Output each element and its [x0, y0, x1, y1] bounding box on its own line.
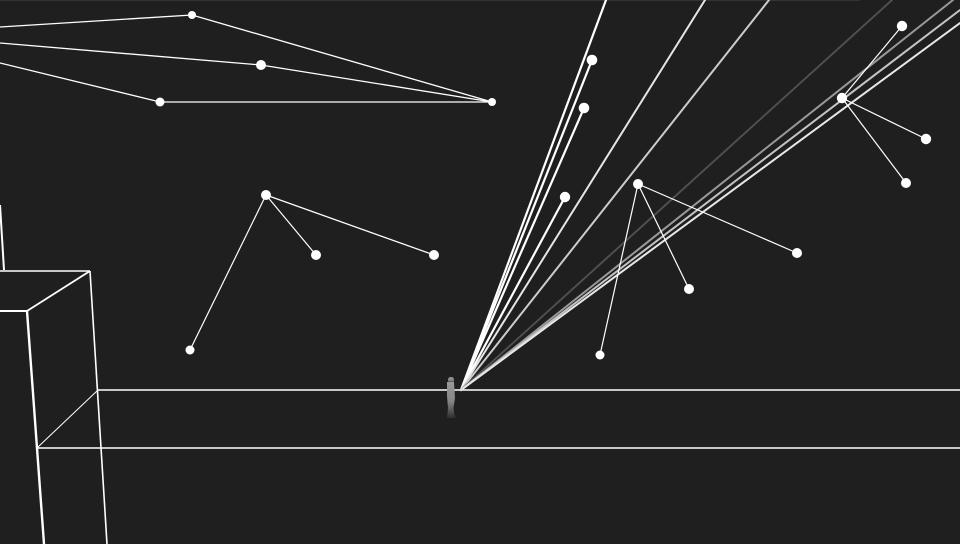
- constellation: top left: [0, 11, 496, 106]
- floor lines: [37, 390, 960, 448]
- constellation: top right: [837, 21, 931, 188]
- ray endpoint nodes: [560, 55, 597, 202]
- constellation: center left: [186, 190, 439, 354]
- human figure silhouette: [447, 377, 456, 418]
- constellation: center right: [596, 179, 802, 360]
- light rays from the figure: [461, 0, 960, 390]
- building wireframe: [0, 205, 107, 544]
